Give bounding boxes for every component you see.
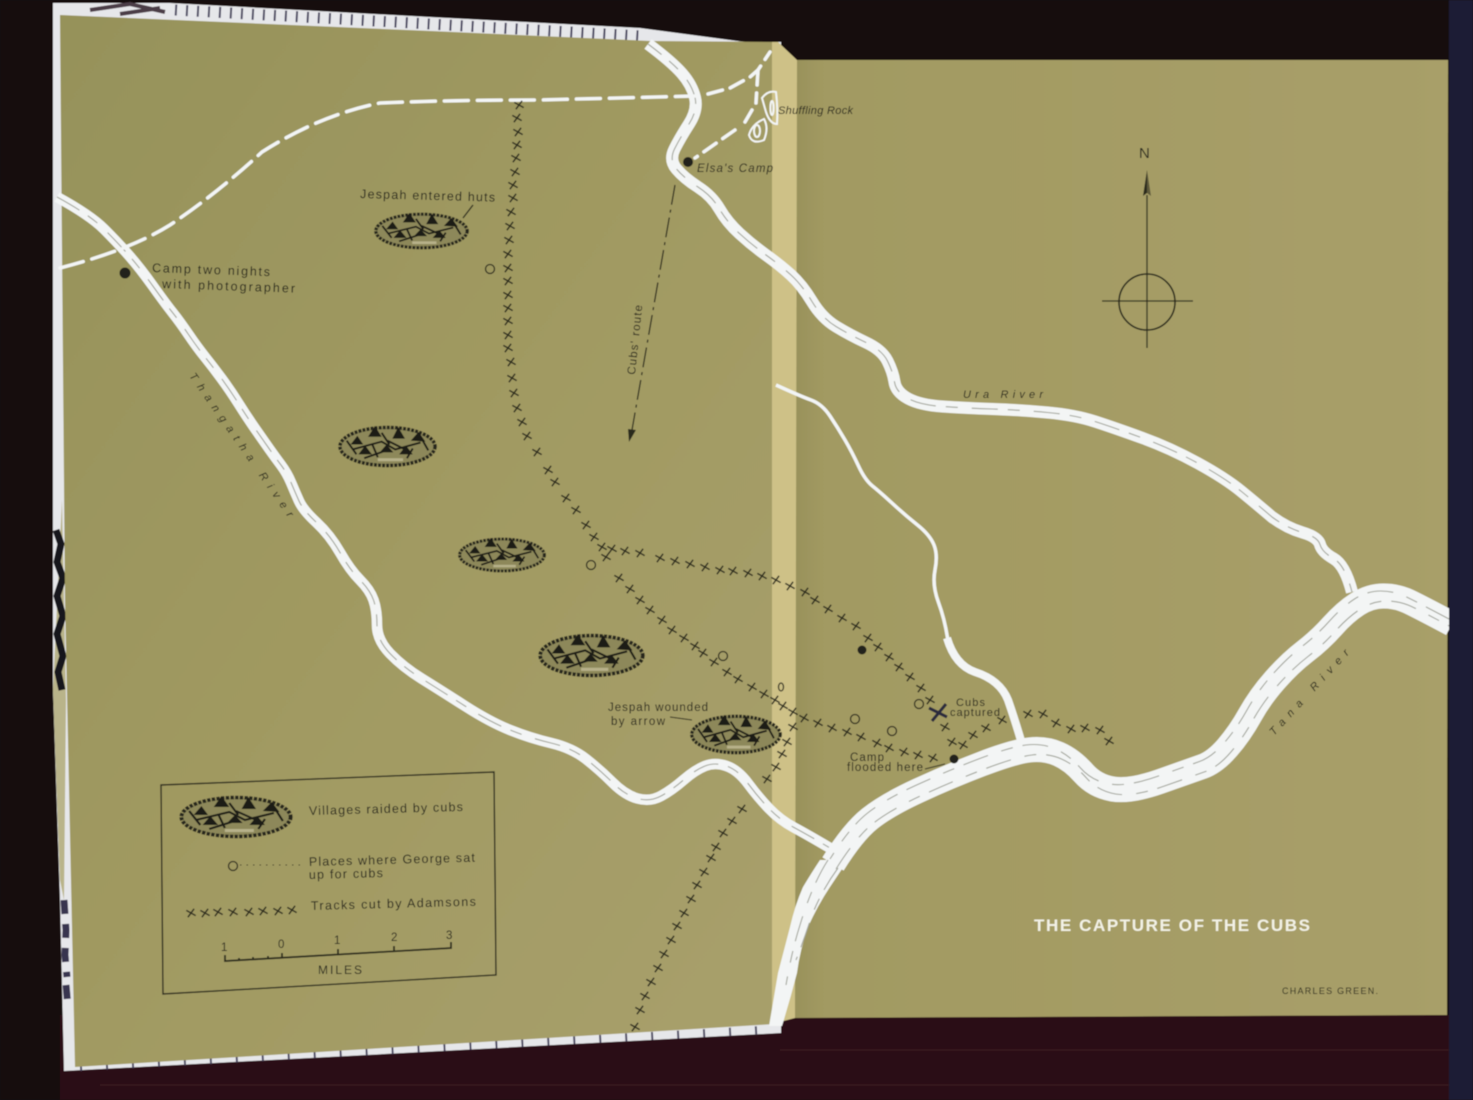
markers: camps bbox=[120, 157, 958, 764]
map labels: by arrow bbox=[611, 716, 666, 728]
map labels bbox=[152, 105, 1353, 774]
villages raided by cubs bbox=[340, 213, 780, 753]
legend: scale bar: 0 bbox=[278, 939, 284, 951]
river: Ura bbox=[648, 44, 1352, 592]
legend: George label bbox=[309, 851, 476, 882]
title: THE CAPTURE OF THE CUBS bbox=[1034, 916, 1310, 935]
road: dashed track bbox=[60, 52, 770, 268]
arrows: label pointers bbox=[463, 205, 945, 769]
compass: N bbox=[1139, 145, 1150, 162]
map labels: Tana River bbox=[1267, 646, 1353, 738]
map labels: Shuffling Rock bbox=[778, 105, 854, 117]
panel: legend bbox=[161, 772, 496, 994]
legend: circle and dots bbox=[228, 862, 300, 870]
map labels: Camp bbox=[850, 752, 884, 764]
legend: scale bar: 1 bbox=[334, 935, 340, 947]
panel: left page bbox=[60, 15, 775, 1067]
legend: track symbol bbox=[191, 910, 292, 913]
river: Tana bbox=[769, 591, 1455, 1026]
book edge beyond right page bbox=[1449, 0, 1473, 1100]
legend: scale bar bbox=[221, 930, 452, 977]
tracks: southern line bbox=[635, 727, 793, 1027]
map labels: Cubs bbox=[956, 697, 986, 709]
tracks: across river east bbox=[963, 714, 1109, 745]
legend: scale bar: MILES bbox=[318, 963, 362, 977]
panel: spine fold bbox=[772, 42, 797, 1024]
legend: scale bar: 2 bbox=[391, 932, 397, 944]
markers: places where George sat up bbox=[486, 264, 924, 736]
map labels: with photographer bbox=[161, 277, 295, 296]
map labels: Jespah entered huts bbox=[360, 187, 495, 205]
legend: George label: Places where George sat bbox=[309, 851, 476, 869]
legend: scale bar: 3 bbox=[446, 930, 452, 942]
map labels: captured bbox=[950, 707, 1000, 719]
map labels: Ura River bbox=[963, 389, 1044, 401]
legend: villages label: Villages raided by cubs bbox=[309, 800, 463, 818]
compass bbox=[1102, 145, 1193, 348]
legend: tracks label: Tracks cut by Adamsons bbox=[311, 895, 476, 913]
river: unnamed tributary bbox=[776, 385, 1022, 744]
map labels: Thangatha River bbox=[187, 371, 296, 521]
map labels: Elsa's Camp bbox=[697, 163, 774, 175]
map labels: Cubs' route bbox=[626, 304, 645, 375]
map labels: Camp two nights bbox=[152, 261, 270, 279]
marker: cubs captured X bbox=[929, 704, 947, 721]
legend: George label: up for cubs bbox=[309, 866, 383, 882]
route: Elsa's camp Cubs' route dash-dot bbox=[628, 185, 675, 442]
tracks: main from north bbox=[508, 105, 933, 758]
tracks: eastern branch to capture bbox=[612, 549, 952, 742]
icon: Shuffling Rock contours bbox=[749, 92, 777, 142]
legend: village symbol bbox=[181, 796, 291, 836]
map labels: flooded here bbox=[847, 762, 923, 774]
map labels: Jespah wounded bbox=[608, 702, 708, 714]
book cover edge with patterned paper bbox=[53, 3, 781, 1071]
credit: CHARLES GREEN. bbox=[1282, 986, 1378, 996]
panel: right page bbox=[785, 60, 1448, 1018]
river: Thangatha bbox=[57, 197, 830, 848]
legend: scale bar: 1 bbox=[221, 942, 227, 954]
